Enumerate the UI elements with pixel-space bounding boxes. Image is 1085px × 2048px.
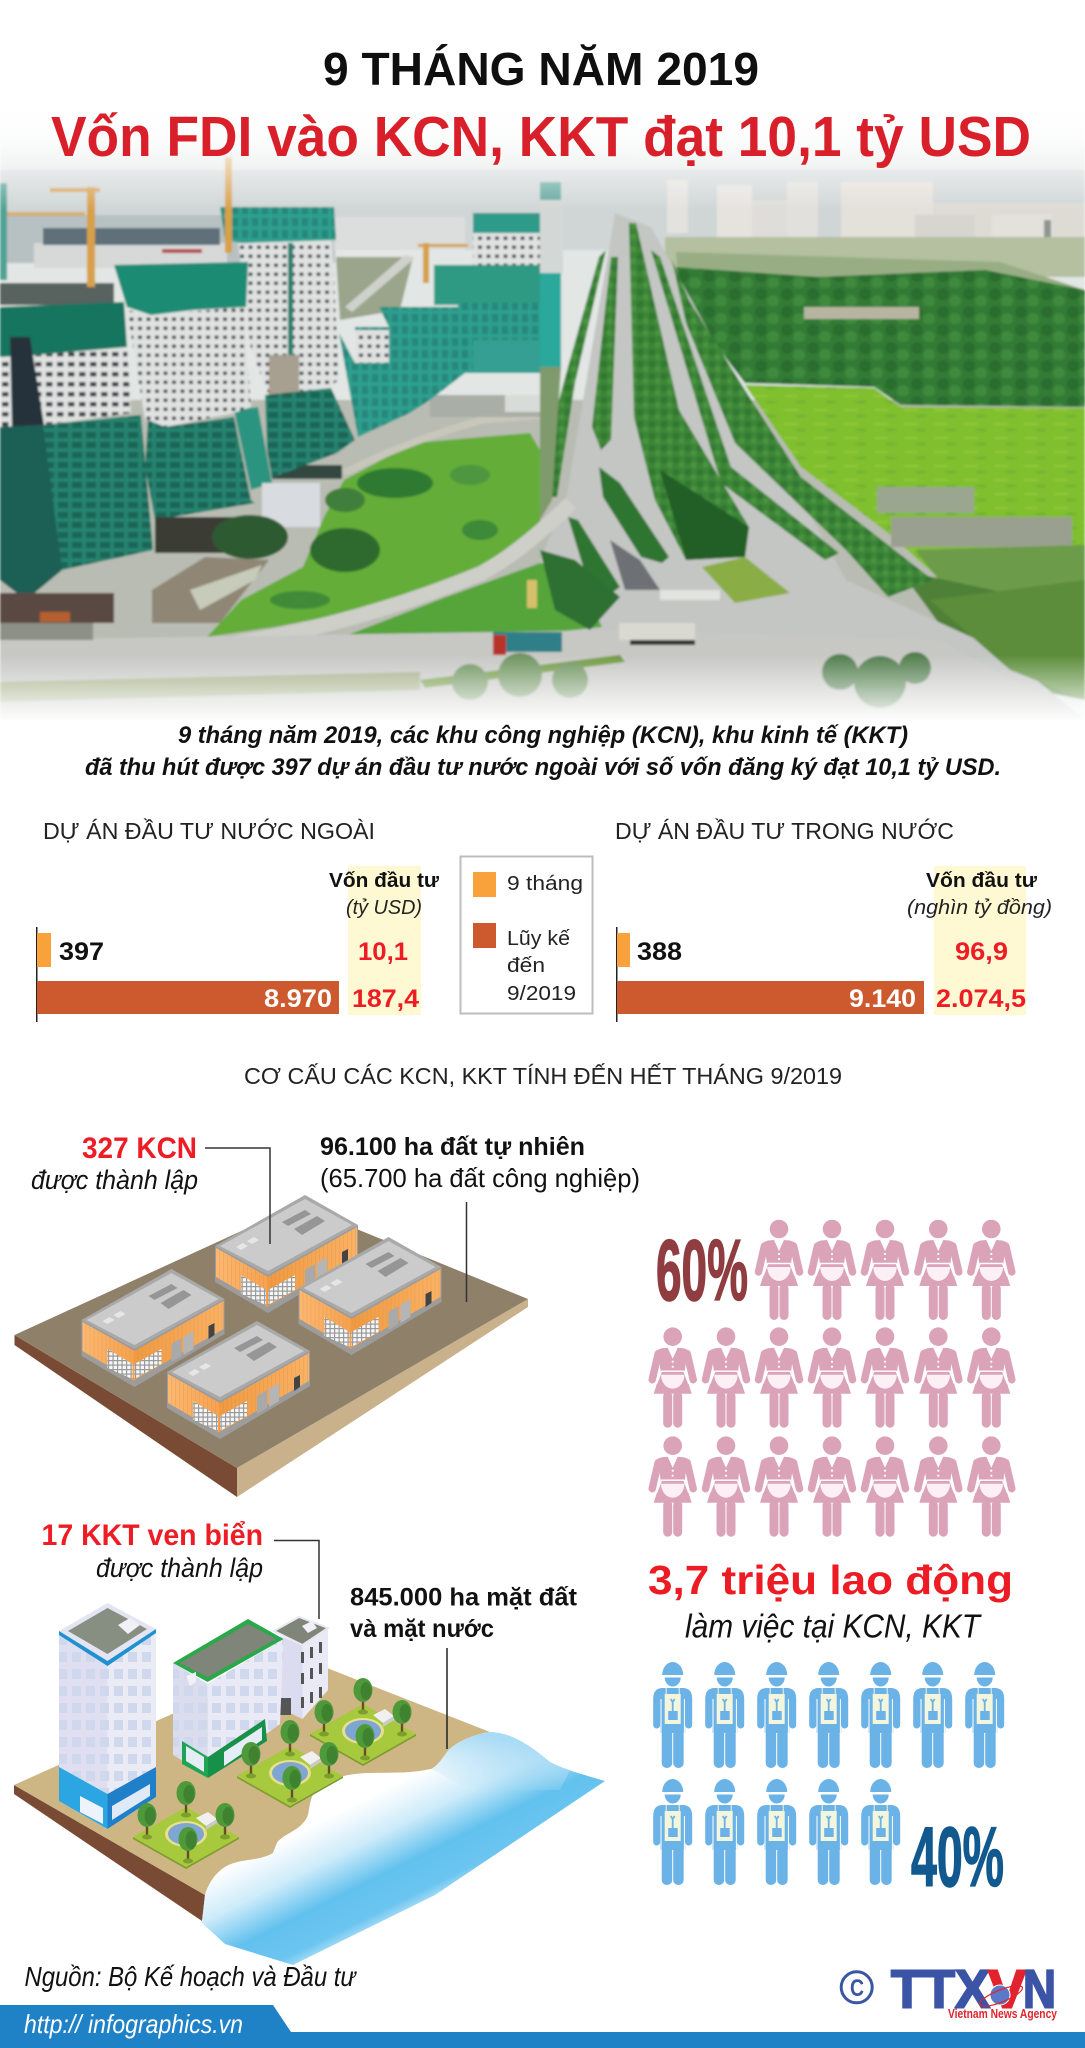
green storefront [182, 1719, 267, 1778]
value: 96,9: 96,9 [955, 938, 1008, 966]
legend label: 9 months: 9 tháng [507, 873, 583, 895]
pictogram: men 40% [653, 1662, 1004, 1885]
green-trim building [173, 1619, 284, 1778]
lower green triangle [304, 563, 602, 652]
value: 2.074,5: 2.074,5 [936, 985, 1026, 1013]
aerial photo: construction towers and boulevard [0, 105, 1085, 723]
bar: cumulative [37, 981, 339, 1014]
capital column header [907, 870, 1052, 919]
capital column header: Vốn đầu tư [926, 870, 1038, 892]
value: 187,4: 187,4 [352, 985, 419, 1013]
value: 397 projects: 397 [59, 938, 104, 966]
value: 8.970 projects: 8.970 [264, 985, 332, 1013]
far back tower [473, 233, 563, 273]
axis [616, 927, 618, 1022]
intro text block: đã thu hút được 397 dự án đầu tư nước ngoài với số vốn đăng ký đạt 10,1 tỷ USD. [85, 754, 1001, 781]
bar: 9 months [617, 933, 630, 967]
panel: foreign investment chart [36, 817, 440, 1022]
small back building [274, 1617, 328, 1719]
tall blue tower [59, 1603, 156, 1829]
subhead: working in zones: làm việc tại KCN, KKT [685, 1608, 983, 1645]
bar: cumulative [617, 981, 924, 1014]
distant fields right [665, 237, 1085, 277]
callout: 327 KCN: được thành lập [31, 1165, 198, 1195]
wave crest [431, 1732, 570, 1790]
callout: land area: 96.100 ha đất tự nhiên [320, 1133, 585, 1161]
river and far bank [0, 215, 335, 263]
legend label: cumulative [507, 928, 576, 1005]
headline: 3,7 million workers: 3,7 triệu lao động [648, 1557, 1013, 1603]
logo: TTXVN: V [988, 1960, 1026, 2020]
section heading: structure: CƠ CẤU CÁC KCN, KKT TÍNH ĐẾN HẾT THÁNG 9/2019 [244, 1062, 842, 1089]
callout: coastal area [350, 1584, 578, 1749]
left field [207, 433, 540, 637]
value: 388 projects: 388 [637, 938, 682, 966]
callout: 327 KCN: 327 KCN [82, 1132, 197, 1165]
ground-level buildings [155, 517, 250, 553]
footer url: http:// infographics.vn [24, 2009, 243, 2039]
pictogram: women 60% [652, 1220, 1012, 1537]
legend swatch: cumulative [473, 923, 496, 948]
intro text block [85, 722, 1001, 781]
intro text block: 9 tháng năm 2019, các khu công nghiệp (KCN), khu kinh tế (KKT) [178, 722, 908, 749]
legend label: cumulative: Lũy kế [507, 928, 570, 950]
small green island [702, 557, 790, 603]
callout: 17 KKT: 17 KKT ven biển [42, 1519, 263, 1552]
teal building cluster [434, 265, 540, 305]
capital column background [348, 866, 421, 1015]
trucks [493, 632, 562, 652]
callout: 17 KKT: được thành lập [96, 1553, 263, 1583]
curved road [170, 503, 571, 652]
logo: TTXVN: Vietnam News Agency [948, 2006, 1058, 2021]
callout: coastal area: và mặt nước [350, 1615, 494, 1643]
copyright mark: C [850, 1975, 864, 2002]
value: 9.140 projects: 9.140 [849, 985, 916, 1013]
logo: TTXVN: TTX [891, 1960, 990, 2020]
capital column header: Vốn đầu tư [329, 870, 440, 892]
source: Nguồn: Bộ Kế hoạch và Đầu tư [24, 1961, 357, 1992]
legend swatch: 9 months [473, 872, 496, 897]
heading: foreign projects: DỰ ÁN ĐẦU TƯ NƯỚC NGOÀI [43, 817, 375, 844]
tree line right of road [672, 260, 933, 597]
logo: TTXVN [891, 1960, 1058, 2021]
top fade [0, 105, 1085, 210]
legend [460, 856, 592, 1014]
label: 40%: 40% [911, 1810, 1004, 1904]
legend label: cumulative: 9/2019 [507, 983, 576, 1005]
boulevard roadway [540, 213, 1085, 720]
tower 1 [0, 283, 114, 305]
copyright mark [841, 1972, 872, 2003]
bright field [745, 385, 1085, 573]
land side [14, 1785, 205, 1921]
axis [36, 927, 38, 1022]
central tree median [629, 223, 749, 560]
bottom fade [0, 655, 1085, 723]
callout: coastal area: 845.000 ha mặt đất [350, 1584, 578, 1612]
callout: 327 KCN [31, 1132, 270, 1244]
heading: domestic projects: DỰ ÁN ĐẦU TƯ TRONG NƯỚC [615, 817, 954, 844]
footer bar [0, 2005, 1085, 2048]
sky haze and ground base [0, 110, 1085, 720]
far skyline [667, 180, 688, 233]
label: 60%: 60% [656, 1223, 748, 1319]
callout: land area [320, 1133, 640, 1302]
capital column header: (nghìn tỷ đồng) [907, 897, 1052, 919]
road by buildings [344, 415, 545, 473]
forest band [676, 267, 1085, 407]
title line 2: Vốn FDI vào KCN, KKT đạt 10,1 tỷ USD [51, 105, 1031, 169]
sea [202, 1732, 605, 1965]
gardens with ponds and trees [310, 1678, 416, 1766]
title line 1: 9 THÁNG NĂM 2019 [323, 43, 759, 95]
tower 2 [234, 407, 272, 490]
logo: TTXVN: N [1023, 1960, 1056, 2020]
panel: domestic investment chart [615, 817, 1052, 1022]
tower 3 [272, 465, 342, 479]
illustration: coastal economic zone [14, 1603, 605, 1965]
callout: 17 KKT [42, 1519, 319, 1619]
bar: 9 months [37, 933, 51, 967]
illustration: industrial park [14, 1195, 528, 1497]
capital column background [934, 866, 1026, 1015]
intersection [0, 630, 1085, 720]
value: 10,1: 10,1 [358, 938, 408, 966]
legend label: cumulative: đến [507, 955, 545, 977]
capital column header: (tỷ USD) [346, 897, 422, 919]
capital column header [329, 870, 440, 919]
sand surface [14, 1657, 490, 1895]
cranes [87, 187, 95, 287]
callout: land area: (65.700 ha đất công nghiệp) [320, 1163, 640, 1193]
